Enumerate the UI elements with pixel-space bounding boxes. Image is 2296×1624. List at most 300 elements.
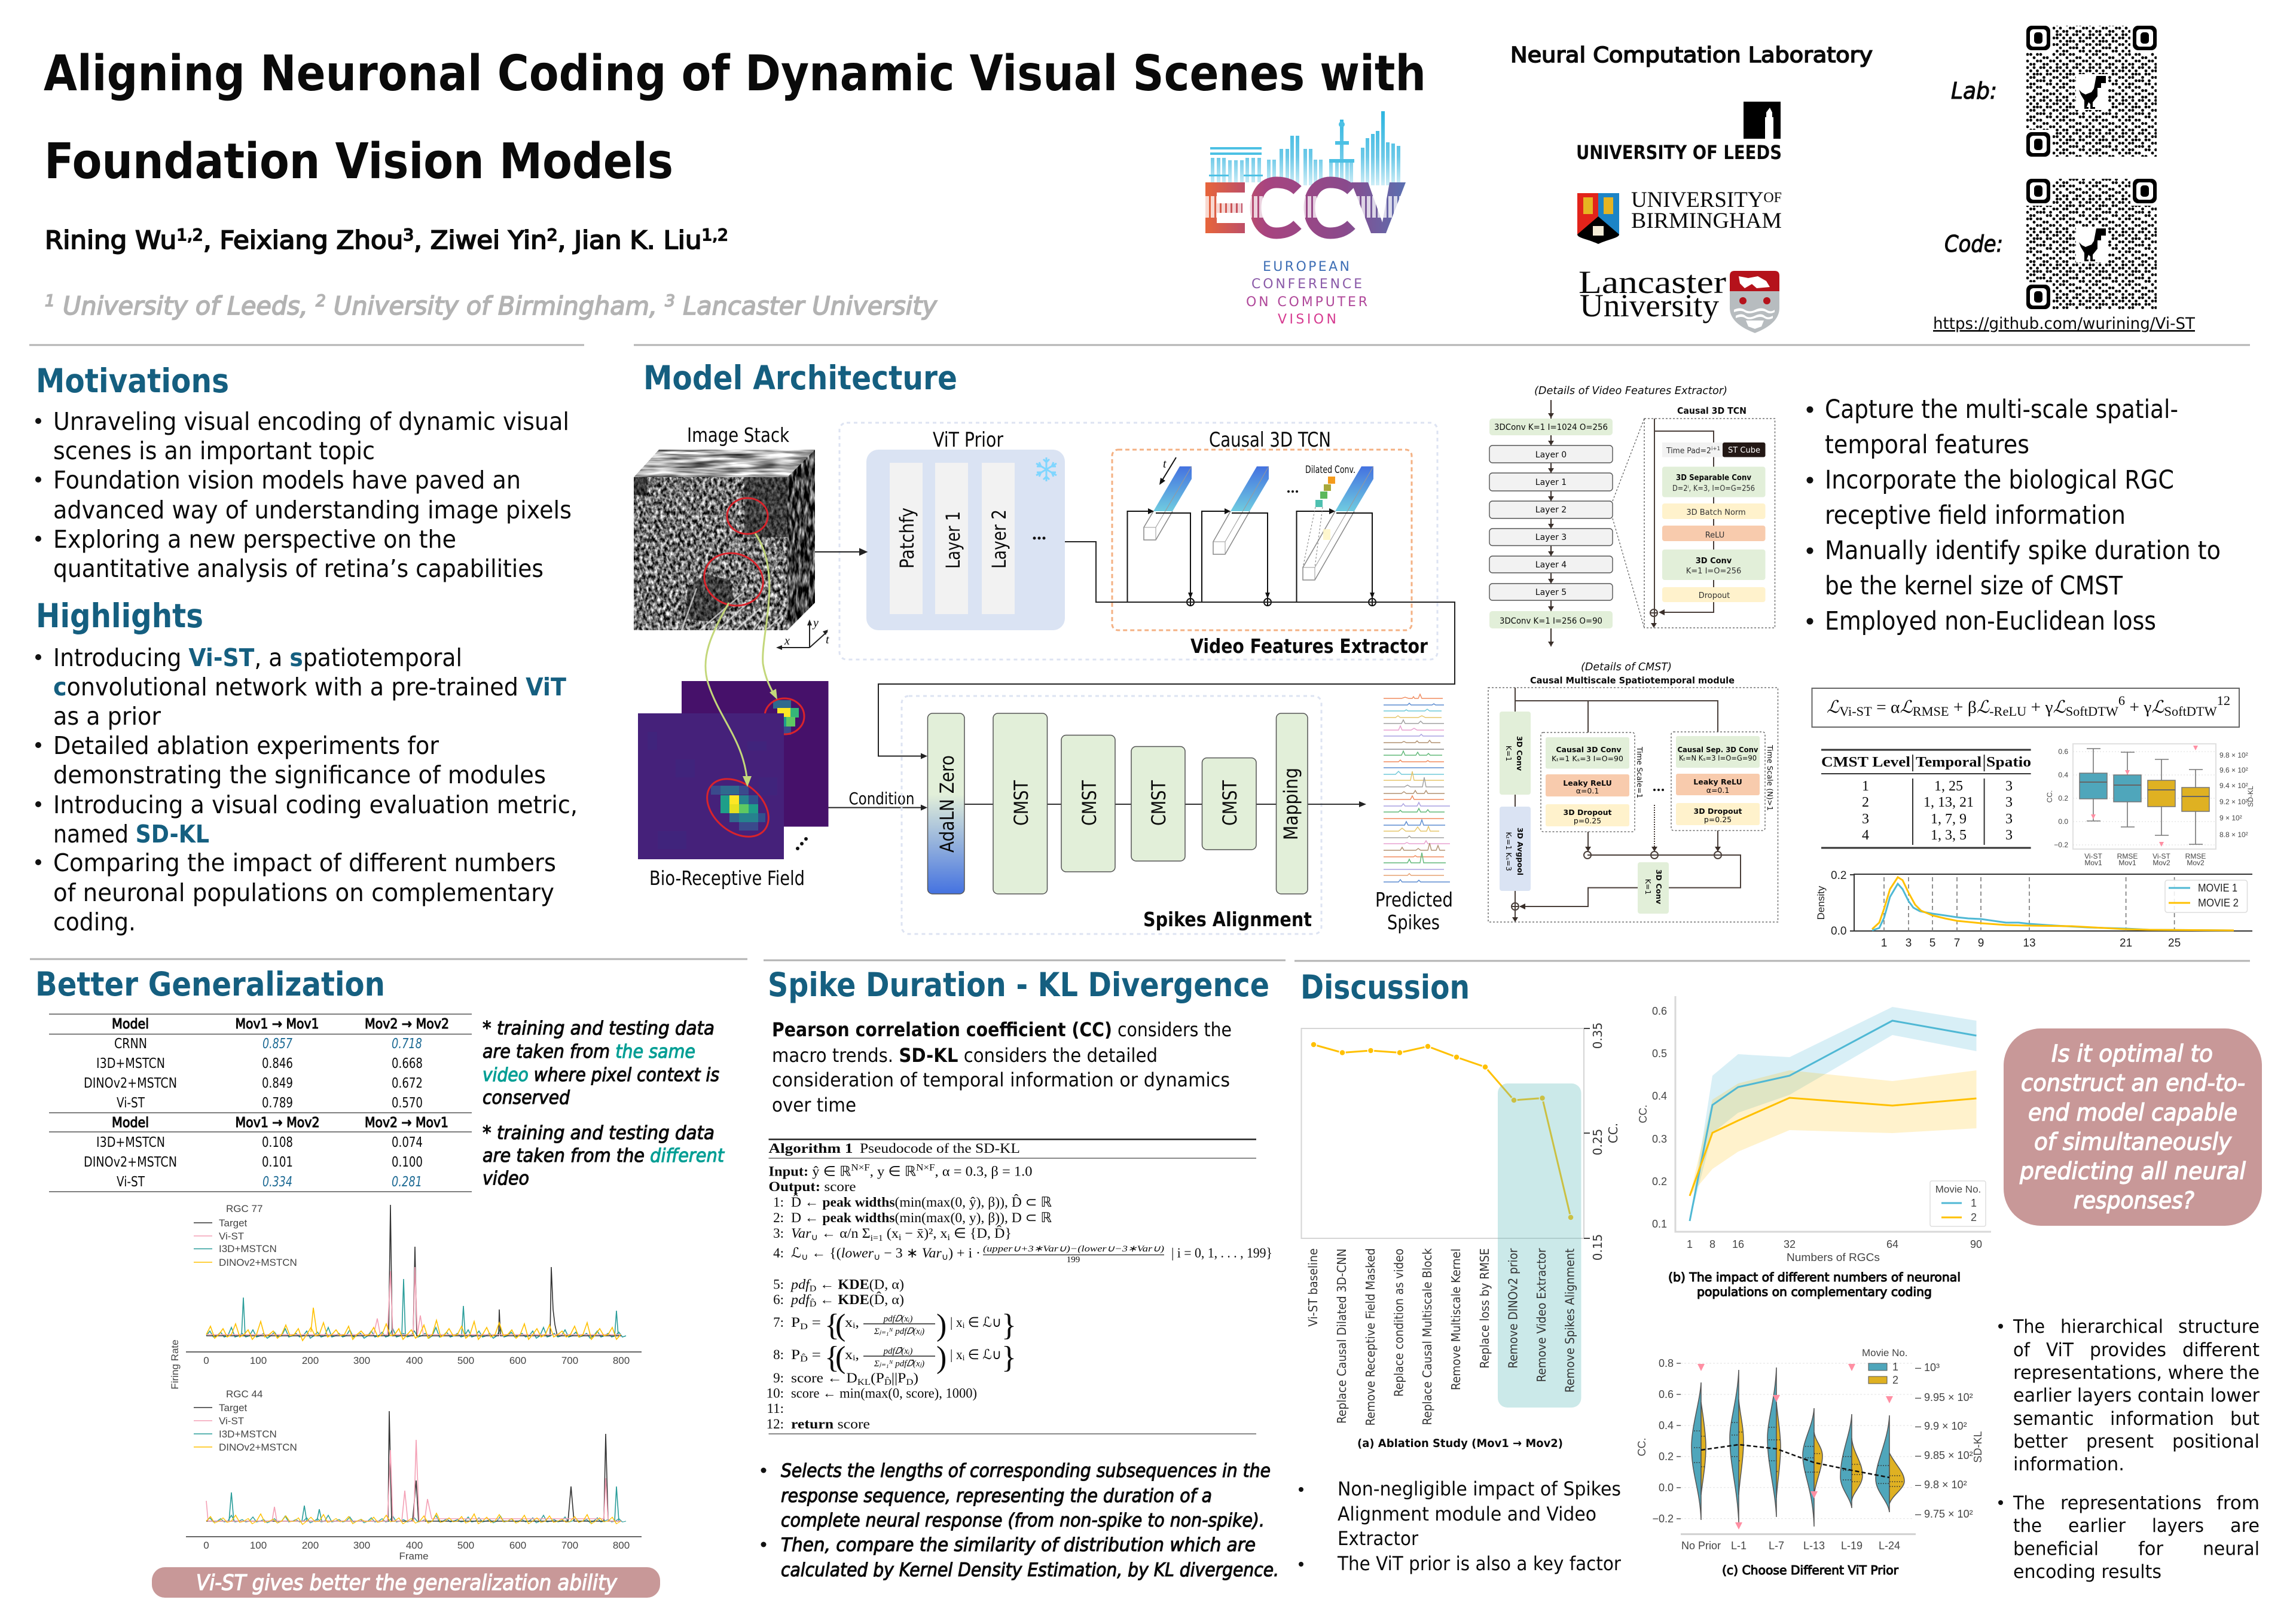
figure: details of CMST: Leaky ReLU <box>1693 777 1742 786</box>
text: motivations bullets: scenes is an important topic <box>53 436 375 465</box>
algorithm: pseudocode of SD-KL: ||P <box>891 1370 906 1385</box>
chart: density plot: MOVIE 1 <box>2198 882 2237 894</box>
text: same video note: conserved <box>483 1087 570 1109</box>
equation: loss function <box>1812 688 2239 727</box>
text: discussion bullets right: The <box>2013 1492 2045 1514</box>
algorithm: pseudocode of SD-KL: D̂ ← peak widths(min(max(0, ŷ), β)), D̂ ⊂ ℝ <box>791 1193 1052 1210</box>
chart: box plot: 9.4 × 10² <box>2219 782 2248 790</box>
chart: ablation study: Replace Causal Dilated 3D-CNN <box>1335 1248 1349 1424</box>
chart: RGC 44 firing rate: DINOv2+MSTCN <box>219 1442 297 1453</box>
chart: RGC 44 firing rate: 300 <box>353 1540 370 1551</box>
table: generalization results: 0.074 <box>392 1135 423 1150</box>
chart: ablation study <box>1301 1022 1620 1450</box>
text: different video note <box>483 1122 725 1189</box>
chart: ablation study: Vi-ST baseline <box>1306 1248 1320 1327</box>
table: CMST levels <box>1821 750 2031 848</box>
table: CMST levels: 2 <box>1862 795 1869 810</box>
text: discussion bullets right: for <box>2138 1538 2163 1560</box>
algorithm: pseudocode of SD-KL: (P <box>871 1370 884 1385</box>
table: generalization results: 0.281 <box>392 1174 422 1190</box>
algorithm: pseudocode of SD-KL: ← <box>816 1292 838 1307</box>
algorithm: pseudocode of SD-KL: ) <box>936 1341 947 1375</box>
text: highlights bullets: of neuronal populations on complementary <box>53 878 554 907</box>
figure: details of video features extractor: Layer 3 <box>1535 533 1567 542</box>
figure: details of video features extractor: Layer 0 <box>1535 450 1567 460</box>
algorithm: pseudocode of SD-KL: 4: <box>773 1246 784 1260</box>
figure: details of video features extractor: D=2ⁱ, K=3, I=O=G=256 <box>1672 484 1755 493</box>
text: spike duration bullets: calculated by Kernel Density Estimation, by KL divergence. <box>781 1559 1279 1581</box>
panel: better generalization <box>35 965 725 1598</box>
callout: open question <box>2004 1028 2262 1226</box>
chart: RGC 44 firing rate: 500 <box>457 1540 474 1551</box>
text: motivations bullets: Unraveling visual encoding of dynamic visual <box>53 407 569 436</box>
figure: details of CMST: p=0.25 <box>1704 815 1732 824</box>
authors: 2 <box>547 226 558 245</box>
chart: density plot: 25 <box>2168 937 2181 950</box>
chart: RGC 77 firing rate: RGC 77 <box>226 1203 262 1214</box>
table: generalization results: Mov2 → Mov1 <box>365 1115 448 1131</box>
arrow: condition: Condition <box>849 789 915 808</box>
chart: number of RGCs: 8 <box>1709 1238 1715 1250</box>
algorithm: pseudocode of SD-KL: Var <box>922 1246 942 1260</box>
text: discussion bullets right: neural <box>2203 1538 2260 1560</box>
panel: spikes alignment: AdaLN Zero <box>936 755 958 853</box>
callout: open question: Is it optimal to <box>2051 1040 2213 1068</box>
chart: RGC 77 firing rate: Vi-ST <box>219 1231 244 1242</box>
chart: different ViT prior violins: – 9.8 × 10² <box>1915 1479 1967 1491</box>
text: highlights bullets: convolutional network with a pre-trained ViT <box>53 673 566 701</box>
chart: number of RGCs: (b) The impact of different numbers of neuronal <box>1668 1270 1961 1284</box>
algorithm: pseudocode of SD-KL: ℒ <box>791 1246 801 1260</box>
chart: different ViT prior violins <box>1636 1347 1984 1577</box>
chart: number of RGCs: 0.4 <box>1652 1090 1667 1102</box>
chart: ablation study: Remove Spikes Alignment <box>1563 1248 1577 1393</box>
block: vit prior: Patchfy <box>896 508 918 569</box>
table: generalization results: Vi-ST <box>117 1174 145 1190</box>
table: generalization results: Mov2 → Mov2 <box>365 1016 449 1032</box>
figure: details of CMST: Kₜ=1 Kₛ=3 I=O=90 <box>1552 754 1623 763</box>
chart: number of RGCs: 1 <box>1687 1238 1693 1250</box>
logo: University of Leeds: UNIVERSITY OF LEEDS <box>1576 141 1782 164</box>
figure: details of CMST: Causal Multiscale Spatiotemporal module <box>1530 675 1735 686</box>
figure: details of video features extractor: 3D Batch Norm <box>1686 508 1746 517</box>
figure: details of video features extractor: 3DConv K=1 I=1024 O=256 <box>1494 423 1608 432</box>
chart: number of RGCs: 0.6 <box>1652 1005 1667 1017</box>
equation: loss function: ℒ <box>1977 698 1990 717</box>
algorithm: pseudocode of SD-KL: 2: <box>773 1210 784 1225</box>
table: generalization results: I3D+MSTCN <box>96 1056 165 1072</box>
chart: number of RGCs: 1 <box>1971 1197 1977 1209</box>
chart: RGC 77 firing rate: 0 <box>203 1355 209 1366</box>
figure: details of CMST: (Details of CMST) <box>1581 661 1672 673</box>
algorithm: pseudocode of SD-KL: xᵢ, <box>845 1347 859 1362</box>
algorithm: pseudocode of SD-KL: 7: <box>773 1315 784 1330</box>
table: generalization results: DINOv2+MSTCN <box>84 1155 177 1170</box>
label: vit prior: ViT Prior <box>933 428 1003 452</box>
callout: open question: construct an end-to- <box>2021 1070 2245 1097</box>
chart: RGC 44 firing rate: I3D+MSTCN <box>219 1428 277 1440</box>
algorithm: pseudocode of SD-KL: KDE(D̂, α) <box>838 1292 902 1307</box>
text: highlights bullets: Introducing Vi-ST, a spatiotemporal <box>53 643 462 672</box>
axes x y t <box>776 616 829 650</box>
figure: details of CMST: K=1 <box>1644 879 1653 895</box>
chart: different ViT prior violins: – 9.75 × 10² <box>1915 1508 1973 1520</box>
chart: box plot: Vi-ST <box>2084 852 2103 860</box>
chart: density plot: 9 <box>1978 937 1984 950</box>
algorithm: pseudocode of SD-KL: Pseudocode of the SD-KL <box>860 1141 1020 1156</box>
chart: box plot: Mov1 <box>2084 859 2102 867</box>
panel: spikes alignment: CMST <box>1147 780 1170 826</box>
table: generalization results: 0.718 <box>392 1036 422 1052</box>
text: CC vs SD-KL <box>772 1018 1232 1116</box>
table: CMST levels: 3 <box>1862 811 1869 827</box>
algorithm: pseudocode of SD-KL: xᵢ, <box>845 1315 859 1330</box>
figure: details of video features extractor: Causal 3D TCN <box>1677 405 1747 416</box>
chart: different ViT prior violins: 0.4 <box>1659 1420 1674 1431</box>
authors: 1,2 <box>176 226 203 245</box>
algorithm: pseudocode of SD-KL: = <box>808 1315 821 1330</box>
figure: details of CMST: α=0.1 <box>1706 786 1729 795</box>
chart: different ViT prior violins: Movie No. <box>1862 1347 1908 1359</box>
text: discussion bullets right: structure <box>2178 1316 2260 1338</box>
text: highlights bullets: coding. <box>53 908 136 936</box>
table: generalization results: 0.789 <box>262 1095 293 1111</box>
equation: loss function: SoftDTW <box>2164 704 2217 719</box>
chart: RGC 44 firing rate: Target <box>219 1402 248 1414</box>
chart: RGC 77 firing rate: 300 <box>353 1355 370 1366</box>
chart: number of RGCs: 32 <box>1784 1238 1796 1250</box>
algorithm: pseudocode of SD-KL: 1: <box>773 1195 784 1210</box>
text: discussion bullets right: The <box>2013 1316 2045 1338</box>
table: CMST levels: 3 <box>2005 828 2013 843</box>
chart: ablation study: 0.25 <box>1590 1129 1605 1155</box>
chart: different ViT prior violins: No Prior <box>1681 1540 1721 1552</box>
text: discussion bullets right: layers <box>2152 1515 2204 1537</box>
heading: highlights: Highlights <box>36 597 203 635</box>
algorithm: pseudocode of SD-KL: 6: <box>773 1292 784 1307</box>
chart: box plot: −0.2 <box>2054 841 2068 849</box>
text: CC vs SD-KL: macro trends. SD-KL considers the detailed <box>772 1044 1158 1067</box>
chart: box plot: 9 × 10² <box>2219 814 2242 822</box>
algorithm: pseudocode of SD-KL: score ← min(max(0, score), 1000) <box>791 1386 977 1401</box>
logo: Lancaster University: Lancaster <box>1578 264 1726 300</box>
algorithm: pseudocode of SD-KL: 8: <box>773 1347 784 1362</box>
label: Lab: Lab: <box>1951 78 1997 104</box>
text: discussion bullets right: earlier layers contain lower <box>2013 1385 2260 1406</box>
chart: box plot: SD-KL <box>2246 786 2255 807</box>
figure: details of CMST: Time Scale=1 <box>1635 746 1644 798</box>
block: vit prior: Layer 1 <box>942 511 964 569</box>
chart: density plot: 0.0 <box>1831 925 1846 938</box>
chart: number of RGCs: 64 <box>1886 1238 1898 1250</box>
chart: number of RGCs: 90 <box>1970 1238 1982 1250</box>
chart: box plot: 0.2 <box>2058 794 2068 802</box>
affiliations: 1 <box>45 292 55 310</box>
chart: ablation study: 0.15 <box>1590 1234 1605 1260</box>
block: vit prior: Layer 2 <box>988 509 1010 569</box>
algorithm: pseudocode of SD-KL: pdf𝐷(xᵢ) <box>883 1314 912 1324</box>
algorithm: pseudocode of SD-KL: D ← peak widths(min(max(0, y), β)), D ⊂ ℝ <box>791 1210 1052 1225</box>
algorithm: pseudocode of SD-KL: Var <box>791 1226 812 1241</box>
algorithm: pseudocode of SD-KL: , α = 0.3, β = 1.0 <box>935 1164 1032 1179</box>
text: discussion bullets right: are <box>2230 1515 2260 1537</box>
logo: Lancaster University <box>1578 264 1779 333</box>
chart: different ViT prior violins: 0.6 <box>1659 1388 1674 1400</box>
text: discussion bullets right: earlier <box>2068 1515 2126 1537</box>
figure: details of video features extractor: Time Pad=2 <box>1666 447 1714 456</box>
text: architecture bullets: temporal features <box>1825 430 2029 460</box>
chart: box plot: RMSE <box>2185 852 2206 860</box>
text: discussion bullets left: Alignment module and Video <box>1338 1503 1596 1525</box>
table: generalization results: 0.846 <box>262 1056 293 1072</box>
algorithm: pseudocode of SD-KL: ← {( <box>808 1246 841 1260</box>
chart: different ViT prior violins: (c) Choose Different ViT Prior <box>1722 1563 1899 1577</box>
chart: ablation study: 0.35 <box>1590 1022 1605 1049</box>
text: motivations bullets: Exploring a new perspective on the <box>53 525 456 554</box>
table: CMST levels: 1, 25 <box>1934 779 1963 794</box>
chart: ablation study: Remove Multiscale Kernel <box>1449 1248 1463 1390</box>
chart: RGC 44 firing rate: Vi-ST <box>219 1415 244 1427</box>
table: generalization results: CRNN <box>114 1036 147 1052</box>
text: discussion bullets right: representations <box>2060 1492 2202 1514</box>
algorithm: pseudocode of SD-KL: lower <box>841 1246 874 1260</box>
algorithm: pseudocode of SD-KL: D <box>906 1378 914 1387</box>
algorithm: pseudocode of SD-KL: | xᵢ ∈ ℒ∪ <box>950 1315 1002 1330</box>
chart: box plot: CC. <box>2045 790 2054 802</box>
text: discussion bullets right: semantic <box>2013 1408 2094 1430</box>
chart: RGC 77 firing rate: I3D+MSTCN <box>219 1243 277 1254</box>
equation: loss function: ℒ <box>2151 698 2165 717</box>
table: generalization results: 0.668 <box>392 1056 423 1072</box>
figure: details of video features extractor: Layer 5 <box>1535 588 1567 597</box>
block: vit prior <box>866 450 1065 630</box>
chart: RGC 44 firing rate: 700 <box>561 1540 578 1551</box>
text: motivations bullets: advanced way of understanding image pixels <box>53 496 572 524</box>
text: same video note <box>483 1018 719 1109</box>
text: highlights bullets: Detailed ablation experiments for <box>53 731 439 760</box>
algorithm: pseudocode of SD-KL: 12: <box>767 1417 784 1431</box>
equation: loss function: Vi-ST <box>1839 704 1872 719</box>
chart: different ViT prior violins: L-1 <box>1731 1540 1747 1552</box>
text: discussion bullets right: information <box>2110 1408 2214 1430</box>
chart: density plot: MOVIE 2 <box>2198 897 2239 909</box>
text: discussion bullets right: beneficial <box>2013 1538 2099 1560</box>
chart: different ViT prior violins: 2 <box>1892 1374 1898 1386</box>
callout: open question: end model capable <box>2028 1100 2237 1127</box>
algorithm: pseudocode of SD-KL: D <box>810 1284 816 1294</box>
figure: details of CMST: α=0.1 <box>1576 786 1599 795</box>
text: different video note: are taken from the different <box>483 1145 725 1167</box>
figure: model architecture diagram <box>634 423 1455 934</box>
chart: box plot: 0.6 <box>2058 747 2068 756</box>
chart: ablation study: Replace Causal Multiscale Block <box>1420 1248 1434 1425</box>
chart: box plot: 0.0 <box>2058 817 2068 826</box>
chart: different ViT prior violins: SD-KL <box>1972 1431 1984 1463</box>
label: predicted spikes: Predicted <box>1375 888 1453 911</box>
authors: , Ziwei Yin <box>414 225 547 255</box>
equation: loss function: 12 <box>2217 693 2230 708</box>
algorithm: pseudocode of SD-KL: ← <box>816 1277 838 1292</box>
chart: different ViT prior violins: – 9.85 × 10² <box>1915 1449 1973 1461</box>
chart: ablation study: Replace condition as video <box>1392 1248 1406 1397</box>
image stack cube <box>634 450 815 630</box>
text: discussion bullets left: Extractor <box>1338 1527 1419 1550</box>
chart: box plot: RMSE <box>2117 852 2138 860</box>
figure: details of video features extractor: ST Cube <box>1728 446 1760 455</box>
figure: details of CMST: 3D Dropout <box>1564 808 1612 817</box>
text: same video note: * training and testing data <box>483 1018 715 1039</box>
chart: number of RGCs: 0.2 <box>1652 1176 1667 1188</box>
text: discussion bullets right: the <box>2013 1515 2042 1537</box>
chart: box plot: 9.8 × 10² <box>2219 751 2248 759</box>
algorithm: pseudocode of SD-KL: | xᵢ ∈ ℒ∪ <box>950 1347 1002 1362</box>
algorithm: pseudocode of SD-KL: pdf <box>790 1292 812 1307</box>
chart: box plot: 0.4 <box>2058 771 2068 779</box>
callout: open question: predicting all neural <box>2019 1158 2246 1185</box>
table: generalization results: 0.849 <box>262 1076 293 1091</box>
bio-receptive field heatmaps <box>638 681 829 859</box>
table: generalization results: 0.101 <box>262 1155 293 1170</box>
chart: number of RGCs: 2 <box>1971 1211 1977 1223</box>
chart: RGC 44 firing rate: 400 <box>406 1540 423 1551</box>
chart: number of RGCs: CC. <box>1637 1105 1649 1123</box>
table: CMST levels: 1 <box>1862 779 1869 794</box>
table: generalization results: I3D+MSTCN <box>96 1135 165 1150</box>
chart: box plot: 8.8 × 10² <box>2219 831 2248 839</box>
arrow: video features to spikes alignment <box>878 542 1455 756</box>
text: motivations bullets <box>35 407 572 583</box>
figure: details of video features extractor: (Details of Video Features Extractor) <box>1534 384 1727 397</box>
equation: loss function: + β <box>1949 698 1977 717</box>
algorithm: pseudocode of SD-KL: 3: <box>773 1226 784 1241</box>
text: spike duration bullets: Then, compare the similarity of distribution which are <box>781 1534 1256 1556</box>
logo: University of Birmingham: OF <box>1763 190 1782 206</box>
equation: loss function: + γ <box>2125 698 2152 717</box>
algorithm: pseudocode of SD-KL: KL <box>857 1378 871 1387</box>
text: architecture bullets: Manually identify spike duration to <box>1825 536 2221 566</box>
text: spike duration bullets: Selects the lengths of corresponding subsequences in the <box>781 1460 1271 1482</box>
panel: spikes alignment: CMST <box>1219 780 1241 826</box>
text: highlights bullets <box>35 643 578 936</box>
table: generalization results: Mov1 → Mov1 <box>236 1016 319 1032</box>
figure: details of video features extractor: 3D Separable Conv <box>1676 474 1751 483</box>
equation: loss function: RMSE <box>1913 704 1949 719</box>
authors: Rining Wu <box>45 225 172 255</box>
text: CC vs SD-KL: over time <box>772 1094 856 1116</box>
icon: ECCV logo <box>1203 111 1406 327</box>
chart: box plot: 9.2 × 10² <box>2219 798 2248 806</box>
figure: details of CMST: K=1 <box>1504 746 1513 761</box>
algorithm: pseudocode of SD-KL: { <box>825 1341 839 1375</box>
figure: details of video features extractor <box>1489 384 1775 646</box>
algorithm: pseudocode of SD-KL: ∈ {D, D̂} <box>950 1225 1012 1241</box>
figure: details of video features extractor: Layer 4 <box>1535 560 1567 570</box>
figure: details of video features extractor: ReLU <box>1705 531 1724 540</box>
label: predicted spikes: Spikes <box>1387 911 1440 934</box>
affiliations: 3 <box>665 292 675 310</box>
logo: University of Leeds <box>1576 102 1782 164</box>
table: CMST levels: 1, 13, 21 <box>1923 795 1974 810</box>
equation: loss function: ℒ <box>2053 698 2066 717</box>
chart: density plot: 1 <box>1881 937 1887 950</box>
equation: loss function: = α <box>1872 698 1900 717</box>
chart: density plot: 21 <box>2120 937 2132 950</box>
chart: RGC 44 firing rate: 200 <box>302 1540 319 1551</box>
chart: different ViT prior violins: – 9.9 × 10² <box>1915 1420 1967 1432</box>
icon: ECCV logo: CONFERENCE <box>1251 277 1362 292</box>
text: highlights bullets: named SD-KL <box>53 820 209 848</box>
table: CMST levels: Spatio <box>1986 755 2031 770</box>
table: generalization results: 0.100 <box>392 1155 423 1170</box>
text: discussion bullets left: The ViT prior is also a key factor <box>1337 1552 1622 1575</box>
text: architecture bullets: be the kernel size of CMST <box>1825 571 2123 601</box>
chart: number of RGCs: populations on complementary coding <box>1697 1285 1932 1299</box>
chart: RGC 77 firing rate: 500 <box>457 1355 474 1366</box>
affiliations: Lancaster University <box>675 291 938 320</box>
text: same video note: are taken from the same <box>483 1041 695 1063</box>
text: spike duration bullets: response sequence, representing the duration of a <box>781 1485 1212 1507</box>
callout: open question: responses? <box>2074 1188 2194 1214</box>
table: CMST levels: 1, 7, 9 <box>1931 811 1967 827</box>
chart: different ViT prior violins: 0.8 <box>1659 1357 1674 1369</box>
affiliations: University of Birmingham, <box>326 291 665 320</box>
label: image stack: Image Stack <box>687 423 790 447</box>
figure: details of CMST: p=0.25 <box>1574 816 1601 825</box>
panel: spikes alignment: Mapping <box>1280 768 1302 840</box>
affiliations: University of Leeds, <box>55 291 316 320</box>
equation: loss function: ℒ <box>1827 698 1840 717</box>
text: CC vs SD-KL: Pearson correlation coefficient (CC) considers the <box>772 1018 1232 1041</box>
figure: details of video features extractor: Layer 1 <box>1535 478 1567 487</box>
algorithm: pseudocode of SD-KL: P <box>791 1315 799 1330</box>
authors: , Jian K. Liu <box>558 225 701 255</box>
chart: box plot: Mov1 <box>2118 859 2136 867</box>
algorithm: pseudocode of SD-KL: ( <box>835 1341 845 1375</box>
affiliations: 2 <box>316 292 326 310</box>
table: CMST levels: Temporal <box>1916 755 1981 770</box>
text: discussion bullets right: of <box>2013 1339 2031 1361</box>
table: CMST levels: 3 <box>2005 795 2013 810</box>
chart: RGC 77 firing rate: DINOv2+MSTCN <box>219 1257 297 1268</box>
chart: ablation study: Remove Video Extractor <box>1534 1248 1549 1382</box>
text: highlights bullets: demonstrating the significance of modules <box>53 761 546 789</box>
text: discussion bullets right: hierarchical <box>2060 1316 2163 1338</box>
chart: density plot: 0.2 <box>1831 869 1846 882</box>
text: CC vs SD-KL: consideration of temporal information or dynamics <box>772 1069 1230 1091</box>
algorithm: pseudocode of SD-KL: | i = 0, 1, . . . , 199} <box>1171 1246 1272 1260</box>
equation: loss function: ℒ <box>1900 698 1913 717</box>
heading: spike duration: Spike Duration - KL Divergence <box>768 966 1269 1004</box>
chart: density plot: 5 <box>1929 937 1935 950</box>
figure: details of video features extractor: K=1 I=O=256 <box>1686 567 1741 576</box>
chart: box plot: Mov2 <box>2152 859 2170 867</box>
text: motivations bullets: Foundation vision models have paved an <box>53 466 521 494</box>
chart: RGC 44 firing rate: 100 <box>250 1540 267 1551</box>
chart: RGC 44 firing rate: Frame <box>399 1550 429 1562</box>
figure: details of video features extractor: 3DConv K=1 I=256 O=90 <box>1500 616 1602 626</box>
table: generalization results <box>49 1014 472 1192</box>
algorithm: pseudocode of SD-KL: − 3 ∗ <box>880 1246 922 1260</box>
algorithm: pseudocode of SD-KL: pdf <box>790 1277 812 1292</box>
chart: different ViT prior violins: 1 <box>1892 1361 1898 1373</box>
table: generalization results: 0.108 <box>262 1135 293 1150</box>
algorithm: pseudocode of SD-KL: ∪ <box>942 1253 948 1262</box>
chart: RGC 44 firing rate: RGC 44 <box>226 1388 262 1400</box>
label: causal 3d tcn: Causal 3D TCN <box>1209 428 1331 452</box>
chart: ablation study: Replace loss by RMSE <box>1477 1248 1492 1369</box>
text: architecture bullets <box>1807 395 2221 636</box>
text: discussion bullets right: encoding results <box>2013 1561 2161 1583</box>
